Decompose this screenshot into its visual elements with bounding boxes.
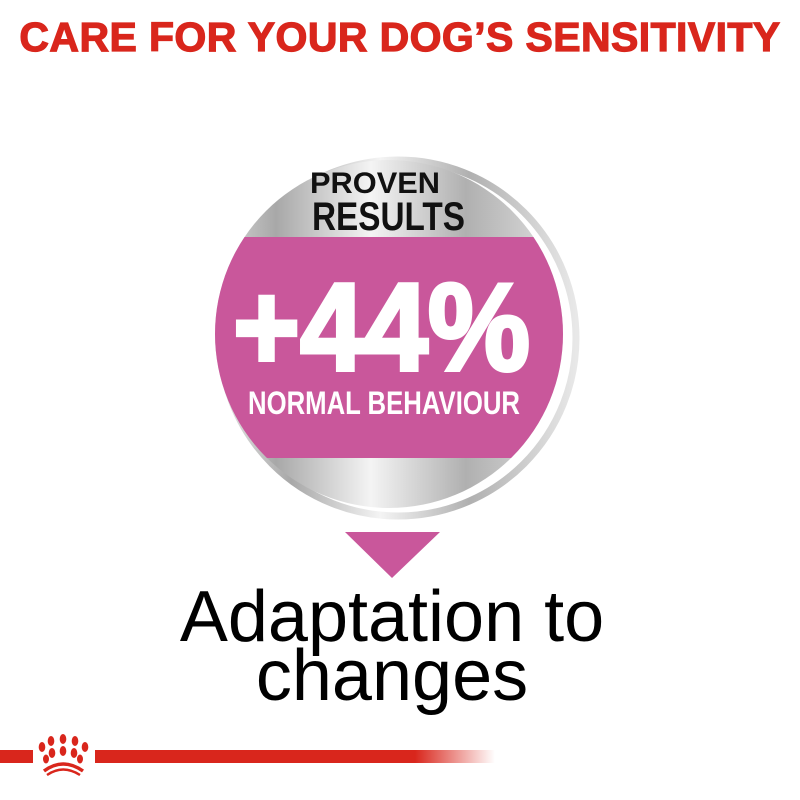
proven results text: PROVEN	[310, 167, 440, 200]
proven results text: RESULTS	[312, 195, 465, 239]
icon: crown	[38, 734, 88, 776]
badge disk	[215, 162, 563, 508]
outer ring	[220, 160, 576, 516]
headline text: changes	[256, 636, 528, 716]
footer line with crown logo	[0, 734, 492, 776]
stat: +44%: +44%	[233, 259, 530, 397]
headline text: Adaptation to	[180, 577, 604, 657]
badge: proven results	[215, 156, 580, 578]
arrow	[345, 532, 440, 578]
headline text	[180, 577, 604, 716]
stat label: NORMAL BEHAVIOUR	[248, 385, 520, 421]
proven results text	[310, 167, 465, 239]
title: CARE FOR YOUR DOG’S SENSITIVITY	[19, 14, 781, 60]
